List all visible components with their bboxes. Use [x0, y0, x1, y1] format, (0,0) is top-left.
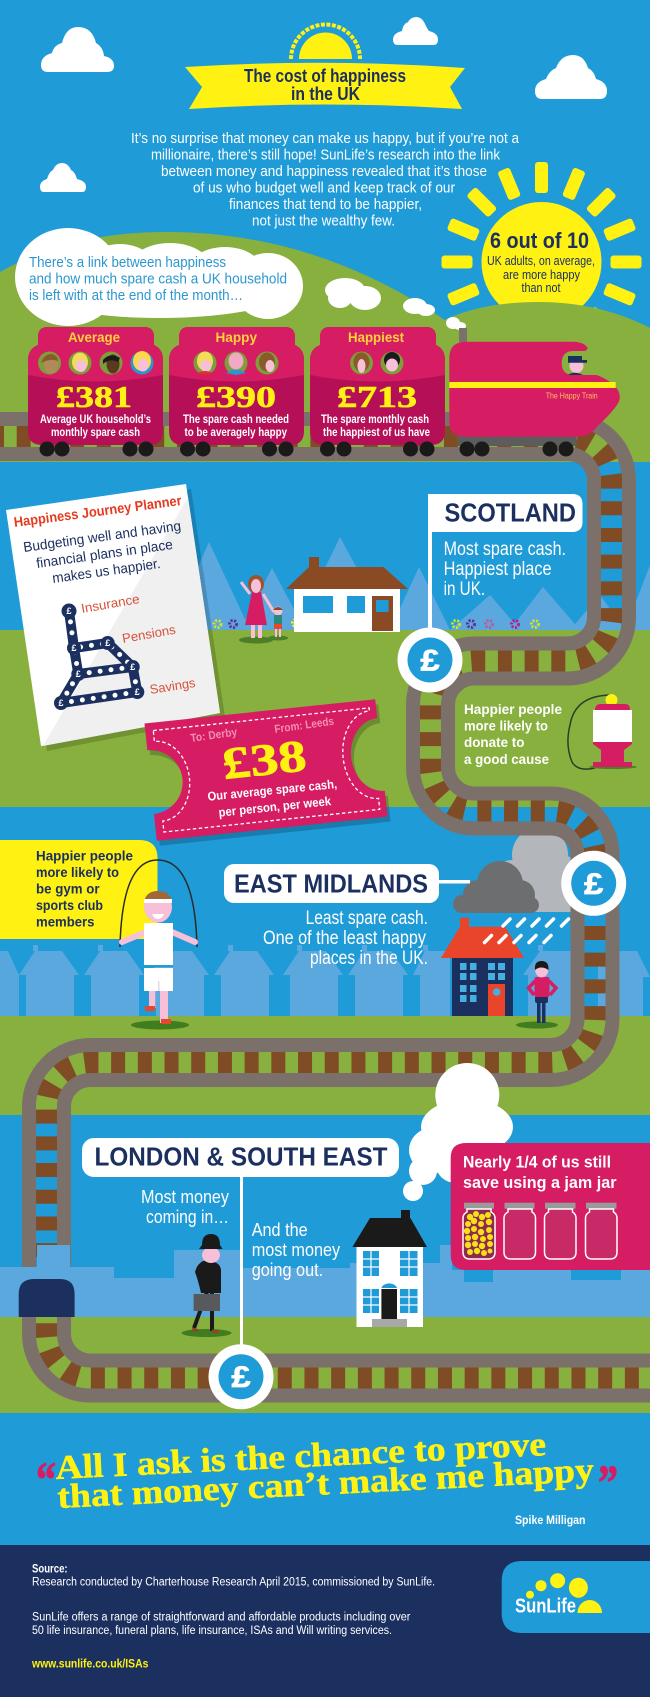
panel: happiness journey planner: Happiness Journey Planner: [13, 492, 183, 530]
Scotland text: [444, 539, 566, 600]
London text right: And the: [252, 1219, 308, 1240]
London text left: [141, 1186, 230, 1227]
East Midlands text: places in the UK.: [310, 948, 428, 969]
carriage: Happiest: The spare monthly cash: [321, 412, 429, 426]
source text: SunLife offers a range of straightforward and affordable products including over: [32, 1612, 411, 1624]
bubble text: [29, 255, 287, 304]
panel: happiness journey planner: [6, 484, 225, 751]
cloud top right: [535, 55, 607, 99]
Scotland text: in UK.: [444, 579, 485, 600]
railway track: [0, 412, 650, 1402]
intro text: finances that tend to be happier,: [229, 197, 422, 213]
sun statistic: are more happy: [503, 267, 580, 282]
East Midlands text: Least spare cash.: [306, 908, 428, 929]
flowers: [214, 620, 538, 628]
Scotland flag label: SCOTLAND: [444, 498, 576, 528]
pound marker East Midlands: [561, 851, 626, 916]
donate text: a good cause: [464, 751, 549, 767]
callout: gym members: more likely to: [36, 864, 119, 880]
carriage: Happy: [169, 327, 304, 445]
quote: [36, 1426, 618, 1516]
intro text: not just the wealthy few.: [252, 214, 395, 230]
London text left: coming in…: [146, 1206, 229, 1227]
panel: happiness journey planner: Pensions: [121, 622, 177, 646]
bubble text: is left with at the end of the month…: [29, 288, 243, 304]
SunLife logo: SunLife: [515, 1596, 576, 1618]
quote: ”: [598, 1454, 618, 1510]
sun statistic: 6 out of 10: [490, 228, 589, 253]
callout: gym members: members: [36, 914, 95, 930]
donate text: Happier people: [464, 701, 562, 717]
pound marker East Midlands: £: [584, 868, 604, 901]
tunnel: [19, 1279, 75, 1317]
route map: £: [135, 687, 140, 697]
East Midlands terrace skyline: [0, 945, 650, 1016]
cloud left small: [40, 163, 86, 192]
carriage: Average: Average: [68, 329, 120, 345]
quote: All I ask is the chance to prove: [55, 1426, 547, 1487]
donate text: donate to: [464, 734, 524, 750]
ticket: From: Leeds: [274, 716, 335, 736]
quote: “: [36, 1451, 56, 1507]
ticket: [144, 699, 391, 846]
intro text: It’s no surprise that money can make us happy, but if you’re not a: [131, 131, 520, 147]
title: in the UK: [291, 83, 361, 104]
locomotive: [449, 328, 620, 446]
route map: £: [105, 638, 110, 648]
title: [244, 65, 406, 104]
panel: jam jars: Nearly 1/4 of us still: [463, 1152, 611, 1172]
panel: jam jars: [451, 1143, 650, 1270]
panel: happiness journey planner: financial plans in place: [35, 536, 174, 571]
sun rays and disc: [442, 162, 642, 337]
panel: happiness journey planner: Savings: [149, 675, 197, 697]
icon: charity box: [568, 694, 637, 769]
quote attribution: Spike Milligan: [515, 1515, 586, 1527]
carriage: Happy: Happy: [216, 329, 257, 345]
source text: Research conducted by Charterhouse Research April 2015, commissioned by SunLife.: [32, 1577, 435, 1589]
East Midlands label: EAST MIDLANDS: [234, 869, 428, 899]
faces: [194, 352, 278, 375]
footer panel: [0, 1545, 650, 1697]
quote: that money can’t make me happy: [57, 1452, 595, 1516]
icon: rising sun above title: [291, 25, 360, 59]
route map: [54, 604, 144, 710]
ticket: £38: [220, 730, 309, 789]
Scotland flag label: [428, 494, 582, 628]
bubble text: There’s a link between happiness: [29, 255, 226, 271]
intro text: millionaire, there’s still hope! SunLife’s research into the link: [151, 148, 501, 164]
driver: [568, 356, 587, 375]
thought bubble: [15, 228, 303, 326]
title: The cost of happiness: [244, 65, 406, 86]
intro text: of us who budget well and keep track of our: [193, 180, 455, 196]
sun statistic: than not: [522, 280, 561, 295]
rain: [484, 919, 568, 942]
SunLife logo: [502, 1561, 650, 1633]
source text: 50 life insurance, funeral plans, life insurance, ISAs and Will writing services.: [32, 1625, 392, 1637]
intro text: [131, 131, 520, 230]
London text right: [252, 1219, 341, 1280]
London text right: going out.: [252, 1259, 323, 1280]
callout: gym members: [0, 840, 158, 939]
bubble text: and how much spare cash a UK household: [29, 272, 287, 288]
callout: gym members: Happier people: [36, 848, 133, 864]
panel: happiness journey planner: Budgeting well and having: [22, 517, 182, 555]
callout: gym members: be gym or: [36, 881, 100, 897]
carriage: Average: Average UK household’s: [40, 412, 151, 426]
donate text: [464, 701, 562, 767]
townhouse: [352, 1210, 427, 1327]
businessman: [182, 1234, 232, 1337]
carriage: Happy: to be averagely happy: [184, 425, 287, 439]
carriage: Average: monthly spare cash: [51, 425, 140, 439]
London text left: Most money: [141, 1186, 230, 1207]
website: www.sunlife.co.uk/ISAs: [31, 1659, 148, 1671]
panel: happiness journey planner: makes us happier.: [51, 555, 161, 586]
faces: [350, 352, 404, 374]
route map: £: [58, 698, 64, 708]
rain clouds: [453, 827, 585, 913]
skipping man: [120, 860, 197, 1030]
green hills: [0, 232, 650, 462]
carriage: Happiest: Happiest: [348, 329, 404, 345]
route map: £: [71, 643, 77, 653]
route map: £: [130, 662, 135, 672]
panel: happiness journey planner: Insurance: [80, 591, 141, 616]
Scotland mountains: [170, 537, 650, 630]
donate text: more likely to: [464, 718, 548, 734]
pound marker Scotland: £: [420, 644, 440, 678]
jar: empty: [544, 1203, 576, 1259]
unhappy man: [516, 961, 558, 1028]
carriage: Happiest: £713: [337, 379, 417, 414]
cloud top centre: [393, 17, 438, 45]
London skyline: [0, 1245, 650, 1317]
sun statistic: [487, 228, 595, 295]
pound marker London: [208, 1344, 274, 1409]
carriage: Average: [28, 327, 163, 445]
source text: Source:: [32, 1563, 68, 1575]
carriage: Average: £381: [56, 379, 132, 414]
panel: jam jars: save using a jam jar: [463, 1173, 617, 1192]
mother and child: [239, 575, 288, 644]
jar: empty: [586, 1203, 617, 1259]
Scotland text: Most spare cash.: [444, 539, 566, 560]
London label: LONDON & SOUTH EAST: [94, 1142, 388, 1172]
train smoke: [325, 278, 466, 330]
pound marker Scotland: [398, 628, 462, 692]
carriage: Happiest: the happiest of us have: [323, 425, 430, 439]
Scotland text: Happiest place: [444, 559, 552, 580]
carriage: Happy: The spare cash needed: [183, 412, 289, 426]
East Midlands text: One of the least happy: [263, 928, 426, 949]
intro text: between money and happiness revealed that it’s those: [161, 164, 487, 180]
pound marker London: £: [232, 1361, 251, 1394]
locomotive: The Happy Train: [546, 390, 598, 400]
ground and sky bands: [0, 630, 650, 1413]
ticket: per person, per week: [218, 794, 332, 820]
carriage: Happy: £390: [196, 379, 276, 414]
jar: empty: [504, 1203, 536, 1259]
source text: [32, 1563, 435, 1637]
title banner: [185, 63, 465, 109]
East Midlands text: [263, 908, 428, 969]
smoke cloud: [403, 1063, 513, 1201]
scottish house: [286, 557, 408, 632]
route map: £: [66, 606, 72, 616]
cloud top left: [41, 27, 114, 72]
faces: [38, 351, 154, 374]
ticket: To: Derby: [190, 726, 238, 745]
London text right: most money: [252, 1239, 341, 1260]
train wheels: [40, 442, 574, 456]
sun statistic: UK adults, on average,: [487, 253, 595, 268]
small house: [441, 918, 524, 1016]
London label: [82, 1138, 399, 1347]
route map: £: [76, 669, 81, 679]
ticket: Our average spare cash,: [207, 777, 338, 804]
carriage: Happiest: [310, 327, 445, 445]
jar: filled with coins: [463, 1203, 495, 1259]
callout: gym members: sports club: [36, 897, 103, 913]
East Midlands label: [224, 864, 470, 903]
